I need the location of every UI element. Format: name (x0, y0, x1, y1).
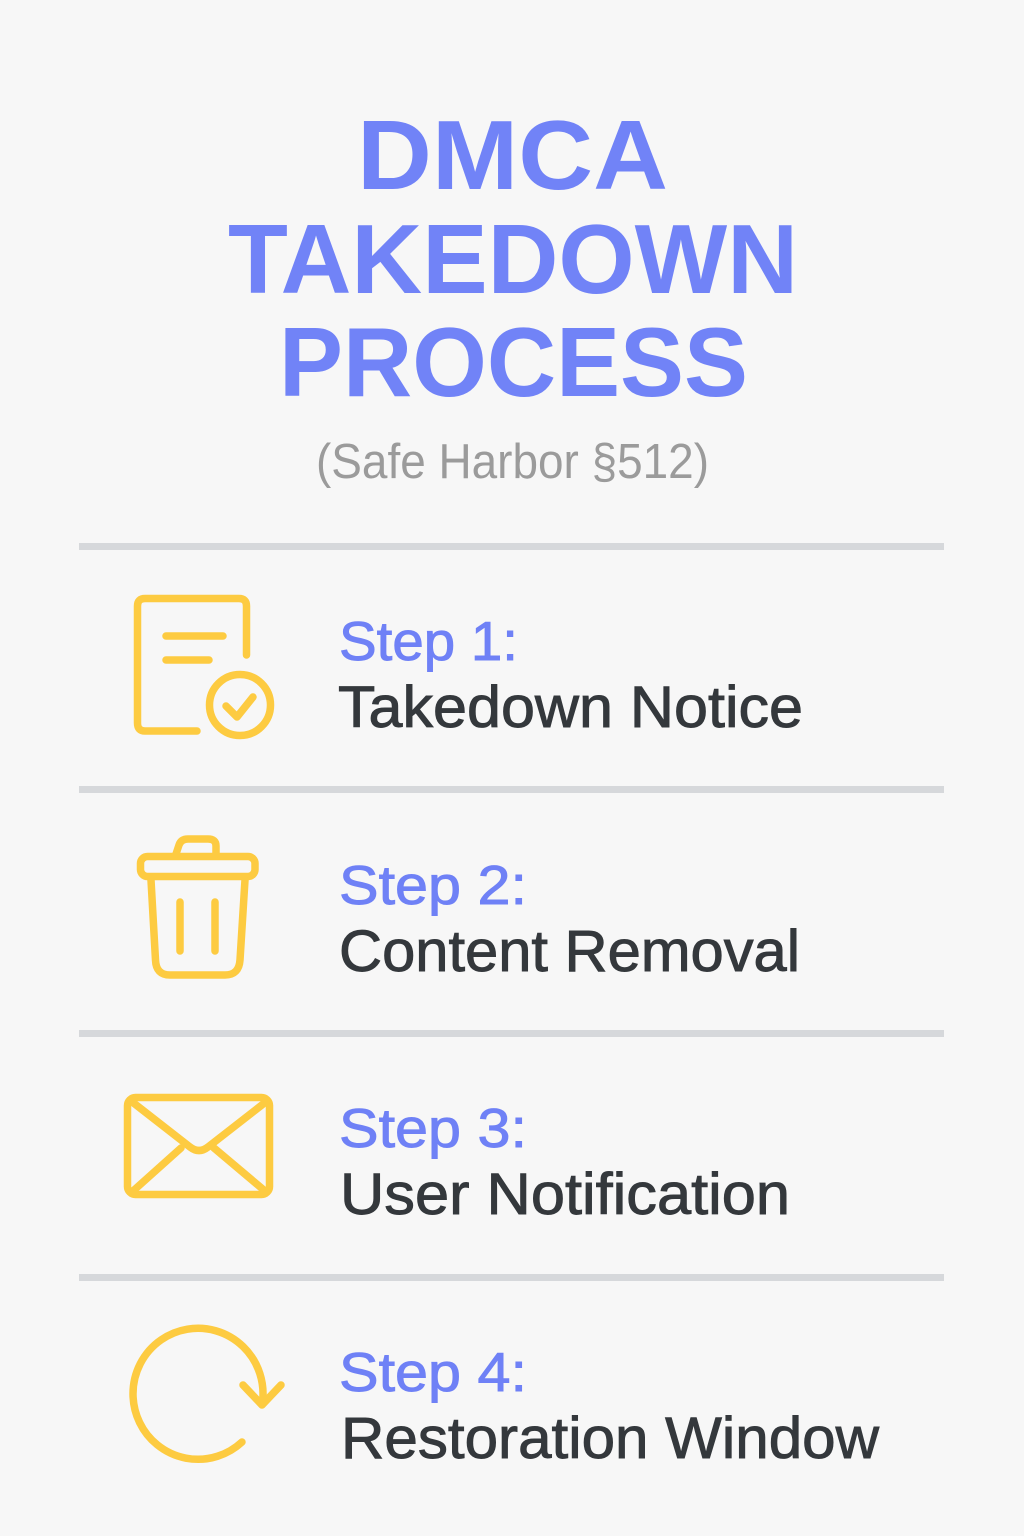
title (228, 100, 798, 417)
step 4 text: Restoration Window (341, 1406, 880, 1471)
title: DMCA (357, 100, 668, 210)
icon: trash can (140, 839, 255, 975)
step 2 text: Content Removal (339, 919, 800, 984)
step 1 text: Takedown Notice (338, 675, 803, 740)
panel: step 2 (140, 839, 800, 984)
icon: circular arrow (133, 1328, 281, 1459)
step 1 text (338, 610, 803, 740)
step 4 text: Step 4: (339, 1341, 527, 1403)
step 2 text: Step 2: (339, 854, 527, 916)
icon: document with check (138, 598, 270, 736)
panel: step 4 (133, 1328, 880, 1471)
step 2 text (339, 854, 800, 984)
step 3 text: User Notification (340, 1162, 790, 1227)
step 4 text (339, 1341, 880, 1471)
icon: envelope (128, 1098, 270, 1194)
step 3 text: Step 3: (339, 1097, 527, 1159)
step 1 text: Step 1: (339, 610, 518, 672)
title: TAKEDOWN (228, 204, 798, 314)
panel: step 1 (138, 598, 803, 740)
step 3 text (339, 1097, 790, 1227)
title: PROCESS (279, 307, 748, 417)
panel: step 3 (128, 1097, 790, 1227)
subtitle: (Safe Harbor §512) (316, 435, 709, 489)
